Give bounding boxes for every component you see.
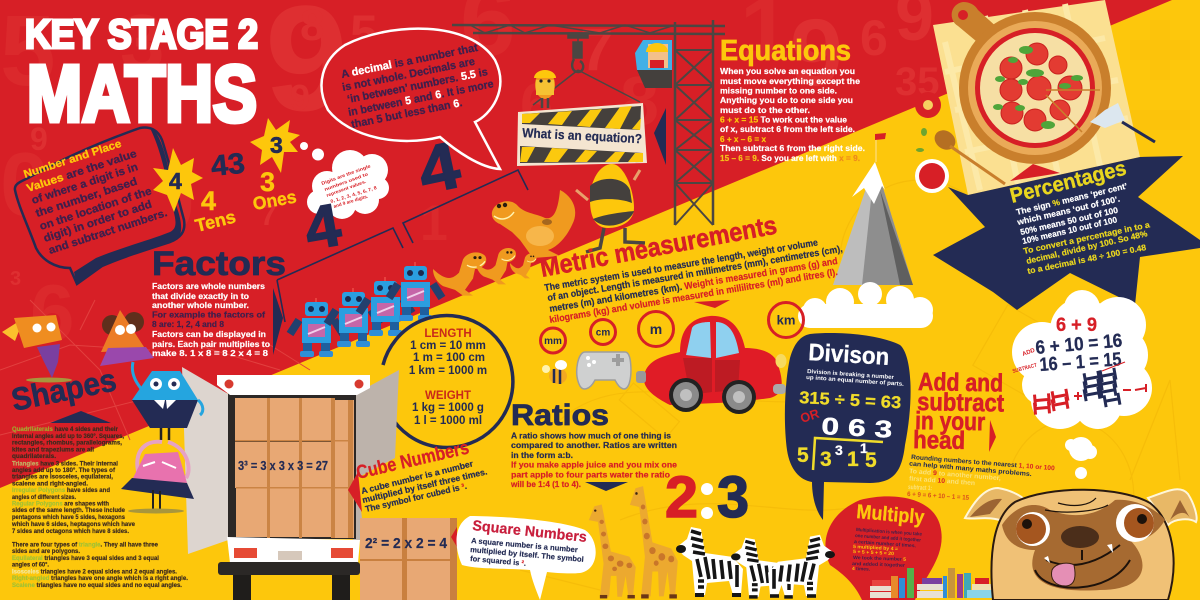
icon: game controller [577, 352, 631, 389]
text: 8 [300, 1, 324, 50]
text: 10% means 10 out of 100 [1021, 214, 1118, 246]
interior [228, 393, 356, 539]
text: quadrilaterals. [12, 453, 56, 460]
label: 4 tens: 4 [201, 186, 216, 216]
ring [915, 92, 941, 118]
mouth [1035, 545, 1130, 588]
text: Right-angled triangles have one angle which is a right angle. [12, 575, 188, 582]
heading: Metric measurements [538, 210, 779, 283]
big digit 4: 4 [300, 191, 346, 263]
flag [875, 135, 877, 162]
unit rings: mm [544, 336, 562, 347]
bubble [322, 29, 500, 169]
background: red diagonal [0, 0, 1172, 488]
shapes panel [2, 310, 203, 589]
text: that divide exactly in to [152, 291, 249, 301]
big digit 4: 4 [412, 127, 466, 208]
character: cone with hair [100, 310, 154, 366]
bumper [227, 537, 360, 563]
conversions [409, 328, 487, 427]
tally bones red [1035, 389, 1068, 415]
title line: key stage 2: KEY STAGE 2 [25, 11, 258, 57]
sign: what is an equation [517, 103, 647, 166]
sauce bowl [915, 159, 949, 193]
unit rings [540, 302, 804, 353]
text: up into an equal number of parts. [806, 375, 904, 388]
ratio 2:3: 2 [665, 465, 698, 530]
text: 9 [30, 121, 48, 157]
speech bubble [785, 333, 911, 520]
left door [182, 367, 237, 554]
striped character [576, 164, 645, 252]
books [870, 568, 997, 598]
label: 3 ones: 3 [260, 167, 275, 197]
cloud text: and 9 are digits. [333, 194, 369, 209]
text: 7 [260, 199, 277, 232]
text: Rounding numbers to the nearest 1, 10 or 100 [911, 454, 1055, 472]
heading: Add and [918, 368, 1003, 397]
icon: red car [636, 300, 786, 414]
text: pentagons which have 5 sides, hexagons [12, 514, 125, 521]
brow [1045, 498, 1108, 512]
text: Anything you do to one side you [720, 95, 853, 105]
icon: bee [542, 360, 567, 384]
snow [852, 162, 885, 204]
text: subtract 1: [908, 484, 932, 492]
text [510, 430, 677, 489]
text: The metric system is used to measure the length, weight or volume [544, 237, 819, 294]
giraffes [589, 486, 678, 598]
heading: Factors [152, 245, 286, 283]
cardboard boxes: 2 squared [360, 518, 457, 600]
decimal text: in between 5 and 6. It is more [347, 78, 495, 119]
thought cloud: digits [300, 142, 389, 219]
body text: and subtract numbers. [47, 207, 169, 257]
ratio 2:3 [665, 465, 749, 530]
text: 9 [290, 77, 310, 118]
cloud text: numbers used to [324, 171, 369, 192]
text [544, 237, 844, 326]
nose [1061, 526, 1099, 548]
text: Then subtract 6 from the right side. [720, 143, 865, 153]
bubble shadow [74, 128, 181, 285]
text [1015, 181, 1151, 276]
tablecloth [933, 0, 1140, 195]
body text [22, 138, 169, 257]
heading: in your [915, 407, 986, 436]
speech bubble [15, 128, 184, 284]
text: and added it together [852, 561, 905, 569]
label: 4 tens [193, 186, 238, 236]
robots [290, 262, 442, 357]
basil [993, 46, 1083, 129]
heading: Multiply [856, 501, 926, 529]
tomatoes [1000, 43, 1082, 131]
text: Irregular Polygons have sides and [12, 487, 110, 494]
decimal text: than 5 but less than 6. [350, 97, 463, 131]
cloud text: Digits are the single [321, 163, 372, 186]
body text: Values are the value [25, 148, 138, 195]
division panel [785, 333, 911, 520]
pointer [989, 420, 996, 452]
text: 5 multiplied by 4 = [853, 544, 898, 552]
thought cloud: mental maths [1012, 290, 1152, 479]
star: 3 [250, 118, 300, 173]
text: The symbol for cubed is ³. [364, 481, 468, 514]
text: first add 10 and then [909, 476, 975, 487]
cloud text [321, 163, 378, 209]
add and subtract panel [907, 368, 1055, 502]
multiply panel [825, 496, 997, 600]
tongue [1052, 563, 1075, 586]
decimal text: ‘in between’ numbers. 5.5 is [346, 66, 489, 106]
text: 8 [620, 62, 659, 140]
text: for squared is ². [470, 554, 526, 568]
conversions: WEIGHT [425, 390, 471, 402]
text: 6 [30, 268, 74, 357]
bracket lines [277, 170, 528, 322]
text: sides of the same length. These include [12, 507, 125, 514]
text: triangles are isosceles, equilateral, [12, 474, 113, 480]
heading: Ratios [511, 399, 609, 432]
text: 5 + 5 + 5 + 5 = 20 [853, 549, 895, 557]
pointer [585, 482, 628, 491]
mountain [798, 133, 933, 328]
conversions: LENGTH [424, 328, 472, 340]
text: can help with many maths problems. [909, 461, 1032, 478]
conversions: 1 kg = 1000 g [412, 402, 484, 414]
text: 5 [350, 5, 378, 61]
pointer [273, 288, 283, 355]
text: A cube number is a number [360, 458, 475, 496]
text: A square number is a number [471, 536, 578, 554]
text: 0 [150, 158, 194, 247]
text: 3 [10, 268, 21, 290]
square numbers panel [451, 516, 596, 600]
text: of x, subtract 6 from the left side. [720, 124, 855, 134]
conversions: 1 l = 1000 ml [414, 415, 482, 427]
text [11, 426, 188, 589]
text: make 8. 1 x 8 = 8 2 x 4 = 8 [152, 348, 268, 358]
text [470, 536, 584, 568]
decimal text: is not whole. Decimals are [341, 56, 476, 94]
text: 15 – 6 = 9. So you are left with x = 9. [720, 153, 860, 163]
rock faces [833, 162, 913, 285]
spoon [931, 126, 959, 154]
text: Multiplication is when you take [856, 527, 922, 538]
add subtract labels: ADD [1022, 348, 1037, 358]
text [852, 527, 922, 573]
text: of an object. Length is measured in millimetres (mm), centimetres (cm), [547, 244, 844, 304]
text: decimal, divide by 100. So 48% [1025, 228, 1149, 266]
roof [217, 375, 370, 395]
long division: 3 [820, 448, 832, 471]
text [720, 66, 865, 163]
text: 4 times. [852, 566, 870, 573]
circle outline [383, 316, 513, 448]
text: Scalene triangles have no equal sides and no equal angles. [12, 582, 182, 589]
text: sides and are polygons. [12, 548, 80, 555]
unit rings: m [650, 321, 662, 337]
body text: digit) in order to add [42, 199, 153, 245]
long division: 5 [797, 444, 809, 467]
clouds [798, 282, 933, 328]
text: 1 [420, 195, 448, 251]
text: 6 + x – 6 = x [720, 134, 766, 144]
pointer: equations [654, 108, 666, 165]
ears [965, 488, 1025, 522]
pointer [348, 472, 362, 512]
bubble [457, 516, 596, 600]
text: Equilateral triangles have 3 equal sides and 3 equal [12, 555, 159, 562]
text [152, 281, 270, 358]
text: which means ‘out of 100’. [1015, 194, 1121, 227]
board [517, 103, 647, 166]
text: Quadrilaterals have 4 sides and their [12, 426, 118, 433]
text: Division is breaking a number [807, 369, 895, 381]
text: The sign % means ‘per cent’ [1015, 181, 1128, 217]
cardboard boxes: 2 squared: 2² = 2 x 2 = 4 [365, 536, 447, 552]
text: missing number to one side. [720, 86, 837, 96]
text: angles add up to 180°. The types of [12, 466, 116, 474]
pointer [451, 527, 457, 547]
unit rings: cm [596, 328, 610, 338]
text: will be 1:4 (1 to 4). [510, 479, 581, 489]
text: To convert a percentage in to a [1022, 219, 1151, 256]
small red triangle [1010, 164, 1060, 181]
text [907, 454, 1055, 502]
thought cloud: mental maths: 16 – 1 = 15 [1039, 349, 1123, 376]
text: Factors can be displayed in [152, 329, 266, 339]
sum: 315 ÷ 5 = 63 [799, 388, 902, 412]
text: in the form a:b. [511, 450, 573, 460]
tower [675, 20, 713, 225]
pug dog [965, 488, 1197, 600]
text: must do to the other. [720, 105, 810, 115]
place value diagram: 3 [270, 132, 283, 158]
or: OR [798, 406, 822, 426]
body text: of where a digit is in [30, 161, 140, 207]
text: must move everything except the [720, 76, 860, 86]
unit rings: km [777, 312, 795, 328]
decimal text [340, 42, 495, 131]
division line [813, 438, 883, 470]
place value diagram [153, 118, 300, 236]
heading: Square Numbers [472, 518, 588, 546]
conversions: 1 cm = 10 mm [410, 340, 486, 352]
conversions: 1 km = 1000 m [409, 365, 487, 377]
text: A ratio shows how much of one thing is [511, 430, 671, 440]
dinosaurs [433, 190, 575, 296]
place value diagram: 4 [169, 168, 182, 194]
decimal text: A decimal is a number that [340, 42, 479, 81]
cloud text: 0, 1, 2, 3, 4, 5, 6, 7, 8 [330, 185, 378, 204]
heading: Cube Numbers [354, 438, 471, 484]
label: 3 ones [251, 167, 298, 214]
heading: Divison [808, 339, 890, 371]
head [991, 490, 1174, 600]
title [25, 11, 258, 138]
number 43: 43 [209, 148, 247, 183]
label: 3 ones: Ones [251, 187, 298, 214]
server [1090, 103, 1125, 128]
conversions: 1 m = 100 cm [413, 352, 485, 364]
text: Triangles have 3 sides. Their internal [12, 460, 118, 468]
text: Factors are whole numbers [152, 281, 265, 291]
text: angles of 60°. [12, 560, 49, 568]
boxes [235, 398, 354, 538]
text: 35 [895, 60, 940, 104]
text: 7 [580, 16, 613, 83]
hazard bands [522, 106, 641, 130]
crane [452, 20, 725, 225]
body text: on the location of the [38, 185, 153, 233]
label: 4 tens: Tens [193, 207, 238, 236]
text: to a decimal is 48 ÷ 100 = 0.48 [1026, 242, 1147, 276]
heading: head [913, 426, 965, 455]
metric measurements panel [538, 210, 844, 326]
paddle [952, 2, 1000, 46]
cube numbers panel [348, 438, 488, 514]
jib [452, 25, 725, 34]
leaves [921, 128, 927, 136]
star: 4 [153, 148, 203, 212]
text: multiplied by itself. The symbol [470, 545, 584, 564]
text: 3 [120, 0, 164, 87]
zebras [676, 527, 835, 599]
character: orange kite [2, 315, 72, 382]
sign text: What is an equation? [522, 125, 643, 146]
long division [797, 440, 877, 472]
ratio 2:3: 3 [717, 465, 749, 530]
eyes [1016, 512, 1050, 546]
thought cloud: mental maths: 6 + 10 = 16 [1035, 330, 1123, 359]
text: When you solve an equation you [720, 66, 855, 76]
pizza illustration [915, 0, 1155, 195]
plus and minus [1074, 390, 1131, 400]
text: If you make apple juice and you mix one [511, 460, 677, 470]
text: 50% means 50 out of 100 [1019, 205, 1119, 237]
factors panel [152, 245, 286, 358]
body text: the number, based [34, 176, 139, 220]
long division: 1 [847, 448, 859, 471]
brown mask [1002, 500, 1165, 591]
text [360, 458, 488, 514]
text: kites and trapeziums are all [12, 446, 94, 454]
hook and cables [533, 33, 640, 105]
cloud shape [300, 142, 389, 219]
quotient: 0 6 3 [821, 413, 893, 444]
text: kilograms (kg) and volume is measured in millilitres (ml) and litres (l). [549, 267, 838, 326]
ratios panel [510, 399, 677, 491]
percentages panel [933, 156, 1200, 310]
truck [182, 367, 399, 600]
text: To add 9 to another number, [909, 468, 1001, 482]
character: blue hexagon [132, 362, 203, 440]
heading: Shapes [8, 361, 119, 418]
text: 9 [790, 0, 843, 106]
text: 6 + x = 15 To work out the value [720, 114, 847, 124]
cabin [635, 40, 672, 88]
text: 6 + 9 = 6 + 10 – 1 = 15 [907, 491, 969, 502]
text: 6 [860, 10, 888, 66]
text: There are four types of triangle. They all have three [12, 542, 158, 548]
thought cloud: mental maths: SUBTRACT [1012, 363, 1038, 375]
text: multiplied by itself three times. [361, 466, 488, 505]
tally bones navy [1084, 368, 1120, 407]
blob [825, 496, 942, 600]
text: internal angles add up to 360°. Squares, [12, 432, 124, 440]
text: We took the number 5 [853, 555, 906, 563]
teeth [1044, 556, 1050, 563]
text: 8 are: 1, 2, 4 and 8 [152, 319, 224, 329]
body text: Number and Place [22, 138, 123, 181]
text: pairs. Each pair multiplies to [152, 339, 270, 349]
heading: Percentages [1008, 157, 1129, 208]
text [806, 369, 904, 388]
text: one number and add it together [855, 533, 921, 544]
heading [913, 368, 1005, 455]
decimal speech bubble [322, 29, 500, 169]
text: scalene and right-angled. [12, 480, 88, 488]
equations panel [720, 35, 865, 163]
text: which have 6 sides, heptagons which have [11, 521, 135, 528]
text: For example the factors of [152, 310, 265, 320]
cloud shape [1012, 290, 1152, 479]
pointer [50, 411, 111, 423]
text: part apple to four parts water the ratio [511, 470, 670, 480]
text: 7 sides and octagons which have 8 sides. [12, 528, 129, 535]
text: Isosceles triangles have 2 equal sides and 2 equal angles. [12, 568, 177, 576]
right door [353, 370, 399, 540]
text: compared to another. Ratios are written [511, 440, 677, 450]
title line: maths: MATHS [27, 49, 257, 138]
long division: 1 [860, 440, 868, 456]
character on sign [534, 70, 556, 108]
text: angles of different sizes. [12, 494, 76, 501]
long division: 5 [865, 449, 877, 472]
text: metres (m) and kilometres (km). Weight is measured in grams (g) and [549, 256, 839, 315]
star shape [933, 156, 1200, 310]
long division: 3 [835, 442, 843, 458]
text: rectangles, rhombus, parallelograms, [12, 440, 122, 446]
length and weight circle [383, 316, 513, 448]
sum: 6 + 9 [1056, 315, 1097, 336]
text: 6 [520, 71, 553, 138]
text: Regular Polygons are shapes with [12, 500, 109, 508]
character: pink trapezoid [121, 442, 194, 514]
text: a certain number of times. [854, 539, 916, 549]
panel: number and place values [15, 128, 184, 285]
text: another whole number. [152, 300, 249, 310]
heading: subtract [917, 388, 1005, 418]
cloud text: represent values. [326, 179, 367, 198]
heading: Equations [720, 35, 851, 67]
text: 0 [0, 135, 50, 235]
cube sum: 3³ = 3 x 3 x 3 = 27 [238, 458, 328, 473]
big dinosaur [492, 190, 575, 258]
